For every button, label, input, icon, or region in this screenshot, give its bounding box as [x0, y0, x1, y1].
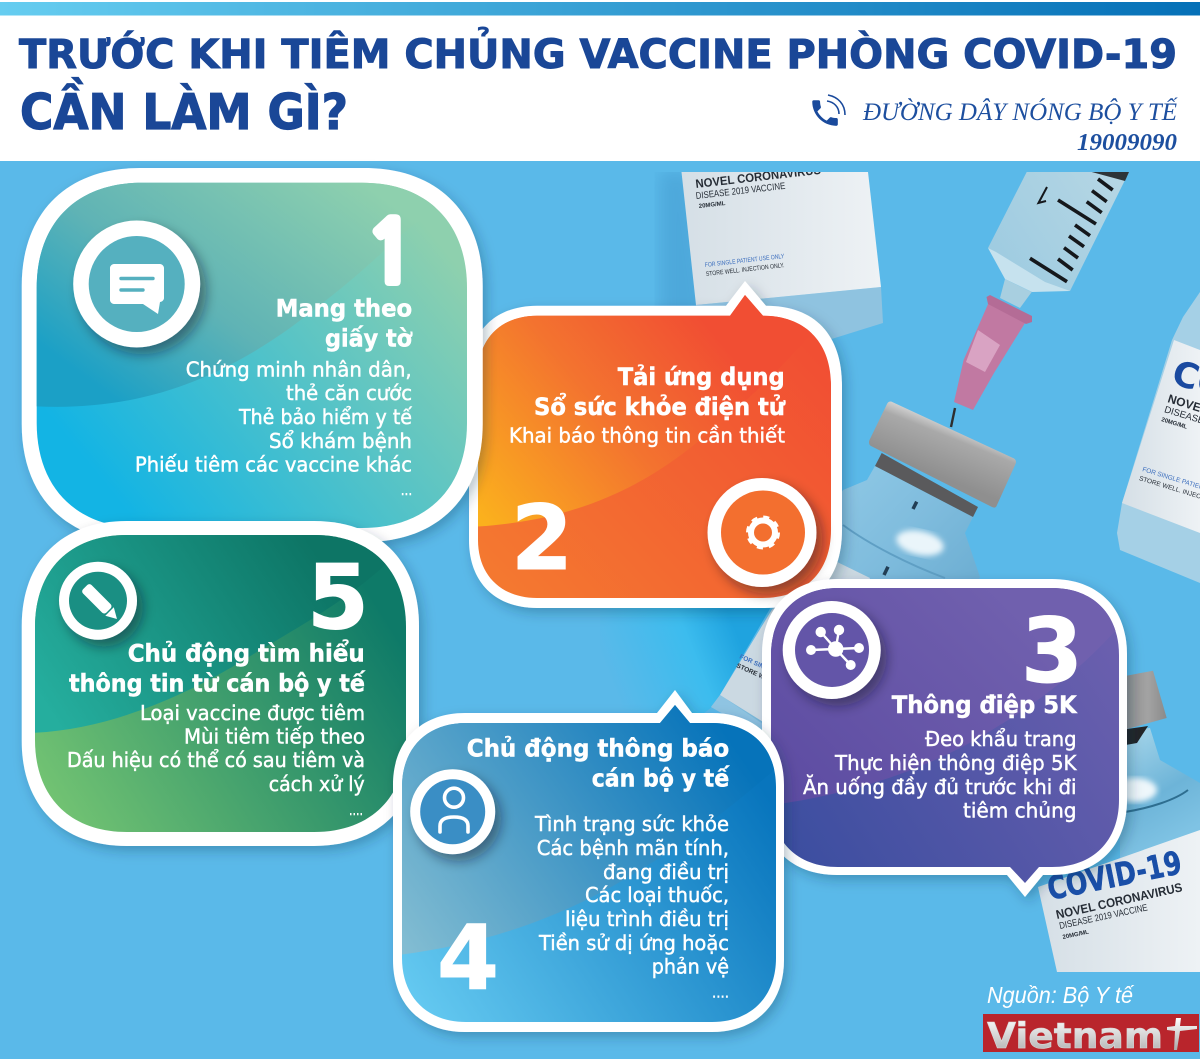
heading — [467, 735, 730, 793]
body text — [534, 812, 729, 1002]
body text: Ăn uống đầy đủ trước khi đi — [803, 775, 1076, 799]
icon: chat bubble — [73, 220, 200, 348]
panel 5: chủ động tìm hiểu — [22, 521, 419, 846]
heading: Chủ động tìm hiểu — [128, 638, 365, 668]
heading: giấy tờ — [325, 325, 412, 353]
body text: Loại vaccine được tiêm — [140, 701, 365, 725]
body text: Thực hiện thông điệp 5K — [834, 751, 1077, 775]
body text: thẻ căn cước — [286, 381, 412, 405]
top gradient bar — [0, 2, 1200, 16]
body text: Mùi tiêm tiếp theo — [184, 725, 365, 749]
heading — [69, 638, 366, 698]
logo: Vietnam+: Vietnam — [987, 1016, 1163, 1057]
body text: Khai báo thông tin cần thiết — [509, 424, 785, 448]
title — [19, 25, 1177, 141]
bottle bottom right — [1038, 671, 1200, 972]
number 2: 2 — [511, 486, 573, 590]
syringe — [951, 172, 1129, 427]
needle hub — [951, 408, 955, 427]
body text — [67, 701, 365, 819]
panel 4: chủ động thông báo — [393, 690, 784, 1032]
body text: Dấu hiệu có thể có sau tiêm và — [67, 748, 365, 772]
body text — [135, 358, 413, 499]
icon: network — [783, 601, 881, 699]
bottle bottom right: NOVEL CORONAVIRUS — [1055, 880, 1184, 922]
heading: Sổ sức khỏe điện tử — [534, 391, 786, 421]
heading: cán bộ y tế — [592, 765, 730, 793]
bottle top: NOVEL CORONAVIRUS — [695, 163, 822, 191]
bottle right: 20MG/ML — [1160, 417, 1188, 431]
panel 1: mang theo giấy tờ — [22, 168, 483, 542]
body text: cách xử lý — [269, 772, 365, 796]
panel 2: tải ứng dụng — [469, 281, 842, 608]
body text: Sổ khám bệnh — [269, 429, 412, 453]
title: CẦN LÀM GÌ? — [20, 76, 348, 141]
heading: Chủ động thông báo — [467, 735, 729, 763]
body text: Chứng minh nhân dân, — [186, 358, 412, 382]
body text: Các loại thuốc, — [585, 883, 729, 907]
body text: tiêm chủng — [963, 799, 1076, 823]
bottle top: 20MG/ML — [699, 201, 726, 210]
body text: ... — [401, 483, 412, 499]
vial centre: STORE WELL — [735, 662, 777, 686]
hotline: 19009090 — [1077, 130, 1177, 156]
bottle top: FOR SINGLE PATIENT USE ONLY — [704, 253, 785, 269]
number 5: 5 — [307, 545, 369, 649]
heading — [276, 295, 412, 353]
title: TRƯỚC KHI TIÊM CHỦNG VACCINE PHÒNG COVID-19 — [19, 25, 1177, 78]
heading: Mang theo — [276, 295, 412, 323]
hotline: ĐƯỜNG DÂY NÓNG BỘ Y TẾ — [862, 97, 1178, 126]
icon: person — [410, 769, 495, 854]
bottle top: DISEASE 2019 VACCINE — [695, 181, 786, 202]
body text: Tình trạng sức khỏe — [534, 812, 729, 836]
heading — [534, 363, 786, 421]
bottle top: STORE WELL. INJECTION ONLY. — [706, 262, 785, 278]
body text: Phiếu tiêm các vaccine khác — [135, 453, 412, 477]
body text: .... — [349, 803, 363, 819]
body text: Đeo khẩu trang — [925, 727, 1076, 751]
body text: .... — [712, 986, 729, 1002]
vial centre — [711, 402, 1016, 730]
body text: Các bệnh mãn tính, — [537, 836, 729, 860]
vial centre: FOR SINGLE — [738, 653, 778, 676]
header band — [0, 0, 1200, 161]
bottle right — [1117, 292, 1200, 583]
background glow beside centre vial — [610, 608, 770, 713]
number 4: 4 — [437, 906, 499, 1010]
heading: Tải ứng dụng — [618, 363, 785, 391]
body text: liệu trình điều trị — [565, 907, 729, 931]
body text: Tiền sử dị ứng hoặc — [538, 931, 729, 955]
body text: đang điều trị — [603, 860, 729, 884]
heading: thông tin từ cán bộ y tế — [69, 670, 366, 698]
bottle bottom right: 20MG/ML — [1062, 929, 1090, 941]
panel 3: thông điệp 5K — [762, 579, 1127, 897]
body text: Thẻ bảo hiểm y tế — [238, 405, 413, 429]
heading: Thông điệp 5K — [892, 691, 1078, 719]
icon: phone — [812, 95, 845, 126]
body text: phản vệ — [652, 955, 729, 979]
bottle top — [660, 163, 883, 342]
hotline — [862, 97, 1178, 156]
icon: pencil — [59, 562, 137, 640]
bottle bottom right: DISEASE 2019 VACCINE — [1058, 902, 1149, 932]
number 1: 1 — [365, 211, 417, 295]
photo: vaccine vials and syringe — [590, 163, 1200, 972]
source note: Nguồn: Bộ Y tế — [987, 982, 1135, 1008]
body text — [803, 727, 1077, 823]
number 3: 3 — [1021, 599, 1083, 703]
icon: gear — [708, 478, 816, 587]
